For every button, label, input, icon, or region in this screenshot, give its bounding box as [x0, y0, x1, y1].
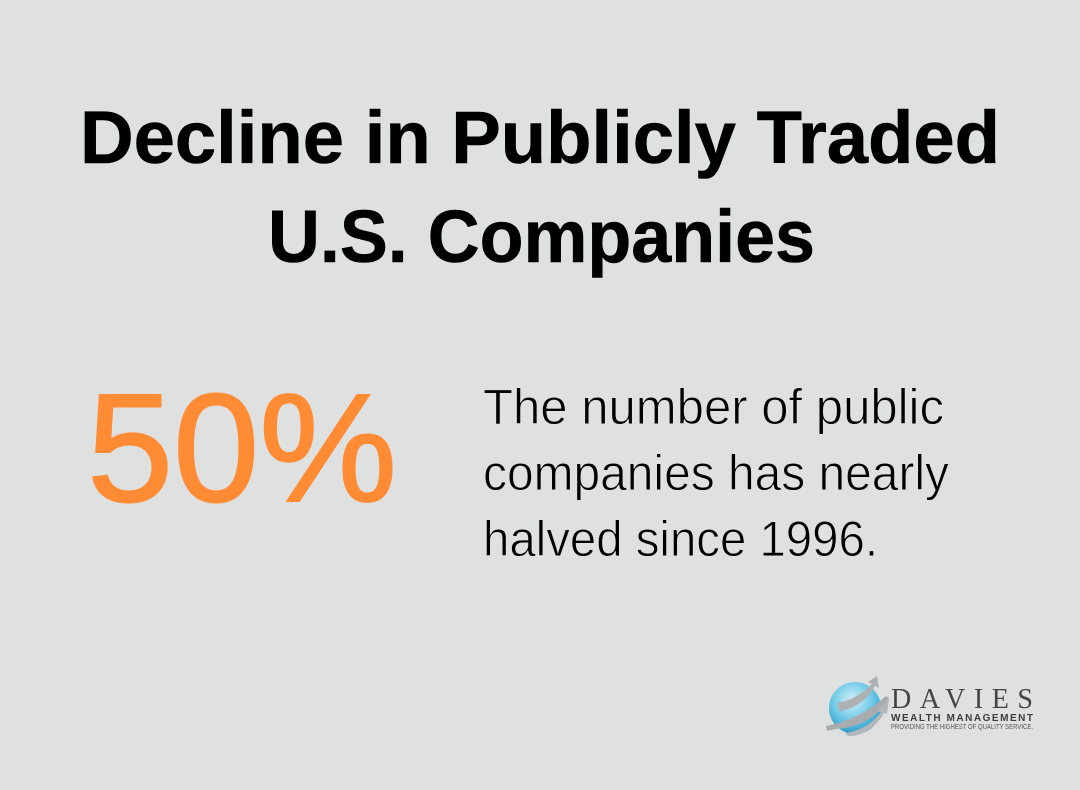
title — [80, 96, 1000, 278]
description text: companies has nearly — [483, 445, 949, 501]
icon: globe with arrows — [826, 676, 889, 736]
description text: The number of public — [483, 379, 944, 435]
logo tagline: PROVIDING THE HIGHEST OF QUALITY SERVICE. — [891, 724, 1033, 731]
description text — [483, 379, 949, 567]
statistic: 50%: 50% — [87, 362, 397, 534]
title: Decline in Publicly Traded — [80, 96, 1000, 179]
logo: Davies Wealth Management — [826, 676, 1033, 736]
description text: halved since 1996. — [483, 511, 878, 567]
logo wordmark: DAVIES — [891, 684, 1033, 715]
title: U.S. Companies — [268, 195, 815, 278]
logo subtitle: WEALTH MANAGEMENT — [891, 713, 1033, 724]
